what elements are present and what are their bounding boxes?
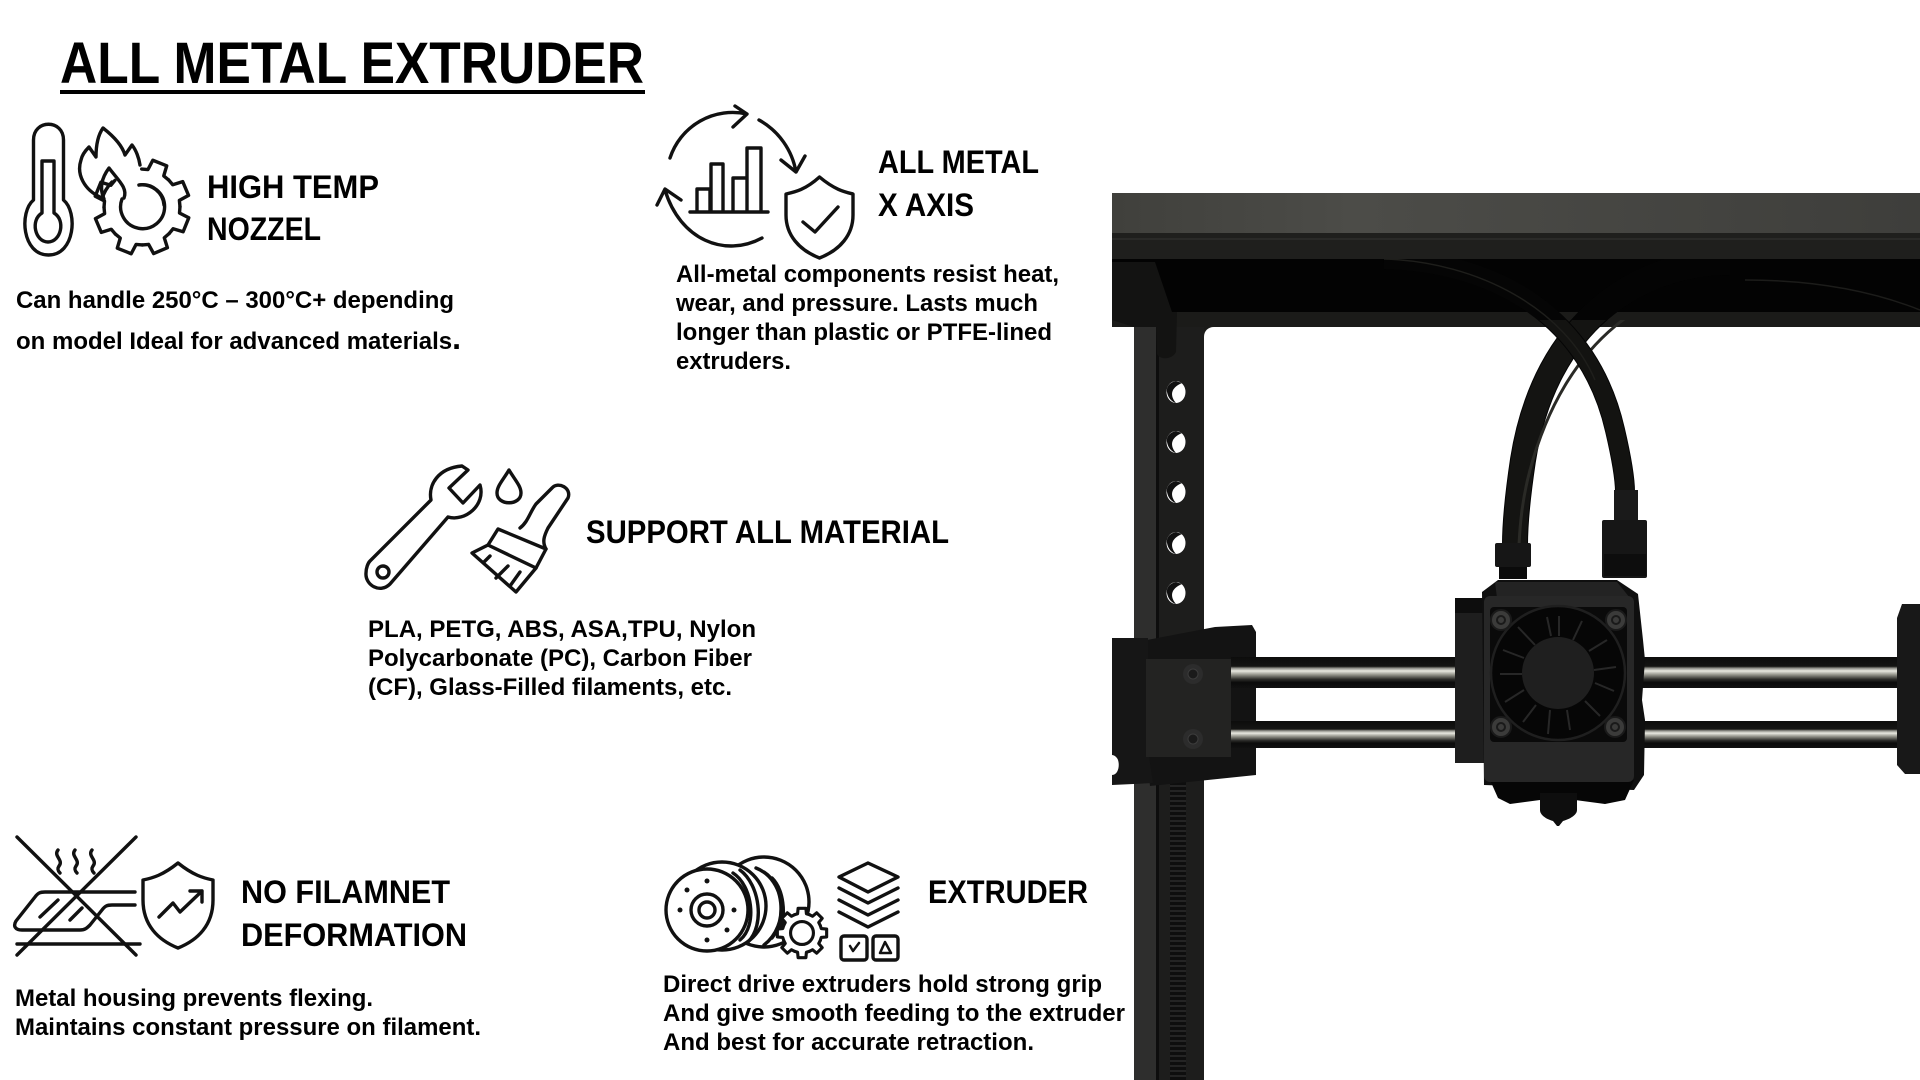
heading: all metal x axis: X AXIS — [878, 187, 974, 223]
vertical column — [1134, 320, 1204, 1080]
fan — [1491, 606, 1625, 740]
text block: no filament deformation: Metal housing prevents flexing. — [15, 985, 373, 1012]
text block: high temp nozzle — [16, 287, 461, 356]
fan recess — [1490, 607, 1627, 742]
panel: extruder — [663, 857, 1125, 1056]
title: ALL METAL EXTRUDER — [60, 31, 644, 96]
icon: material layers and small boxes — [839, 863, 898, 960]
left carriage front — [1112, 638, 1231, 785]
tubes — [1384, 259, 1920, 545]
text block: all metal x axis — [675, 261, 1059, 375]
side block — [1455, 598, 1485, 763]
icon: thermometer — [25, 124, 72, 255]
text block: extruder: And best for accurate retraction. — [663, 1029, 1034, 1056]
panel: support all material — [366, 466, 949, 701]
text block: support all material: (CF), Glass-Filled filaments, etc. — [368, 674, 732, 701]
icon: shield with trend arrow — [143, 863, 213, 948]
panel: high temp nozzle — [16, 124, 461, 356]
icon: shield with check — [786, 177, 853, 258]
icon: flame and gear — [80, 128, 191, 256]
text block: high temp nozzle: on model Ideal for advanced materials. — [16, 320, 461, 356]
left carriage rear — [1147, 625, 1256, 786]
rear housing — [1482, 580, 1645, 790]
text block: high temp nozzle: Can handle 250°C – 300°C+ depending — [16, 287, 454, 314]
text block: all metal x axis: longer than plastic or PTFE-lined — [676, 319, 1052, 346]
heading: high temp nozzle: NOZZEL — [207, 211, 321, 247]
text block: no filament deformation: Maintains constant pressure on filament. — [15, 1014, 481, 1041]
text block: no filament deformation — [15, 985, 481, 1041]
text block: extruder: And give smooth feeding to the extruder — [663, 1000, 1125, 1027]
fan screws — [1491, 610, 1626, 737]
extruder assembly — [1455, 580, 1645, 826]
text block: extruder: Direct drive extruders hold strong grip — [663, 971, 1102, 998]
top frame bar — [1112, 193, 1920, 358]
hotend base — [1490, 780, 1634, 804]
heading: no filament deformation — [241, 874, 467, 953]
heading: high temp nozzle: HIGH TEMP — [207, 169, 379, 205]
guide rods — [1231, 657, 1905, 748]
panel: no filament deformation — [15, 837, 481, 1041]
icon: cycle arrows and bar chart — [657, 106, 805, 246]
panel: 3D printer photo illustration — [1112, 193, 1920, 1080]
text block: all metal x axis: wear, and pressure. Lasts much — [675, 290, 1038, 317]
heading: support all material: SUPPORT ALL MATERIAL — [586, 514, 949, 550]
text block: support all material — [368, 616, 756, 701]
top housing shade — [1495, 582, 1630, 598]
text block: all metal x axis: extruders. — [676, 348, 791, 375]
icon: wrench — [366, 466, 481, 588]
text block: support all material: Polycarbonate (PC), Carbon Fiber — [368, 645, 752, 672]
heading: no filament deformation: DEFORMATION — [241, 917, 467, 953]
heading: all metal x axis — [878, 144, 1039, 223]
icon: crossed-out heated filament — [15, 837, 140, 955]
text block: extruder — [663, 971, 1125, 1056]
text block: support all material: PLA, PETG, ABS, ASA,TPU, Nylon — [368, 616, 756, 643]
front panel — [1484, 596, 1634, 782]
heading: no filament deformation: NO FILAMNET — [241, 874, 450, 910]
heading: extruder: EXTRUDER — [928, 874, 1088, 910]
icon: filament spools and gear — [666, 857, 827, 958]
icon: paint brush and drop — [472, 470, 569, 592]
text block: all metal x axis: All-metal components resist heat, — [676, 261, 1059, 288]
heading: high temp nozzle — [207, 169, 379, 247]
tube connectors — [1495, 490, 1647, 579]
nozzle — [1540, 793, 1577, 826]
panel: all metal x axis — [657, 106, 1059, 375]
right carriage — [1897, 604, 1920, 774]
heading: all metal x axis: ALL METAL — [878, 144, 1039, 180]
